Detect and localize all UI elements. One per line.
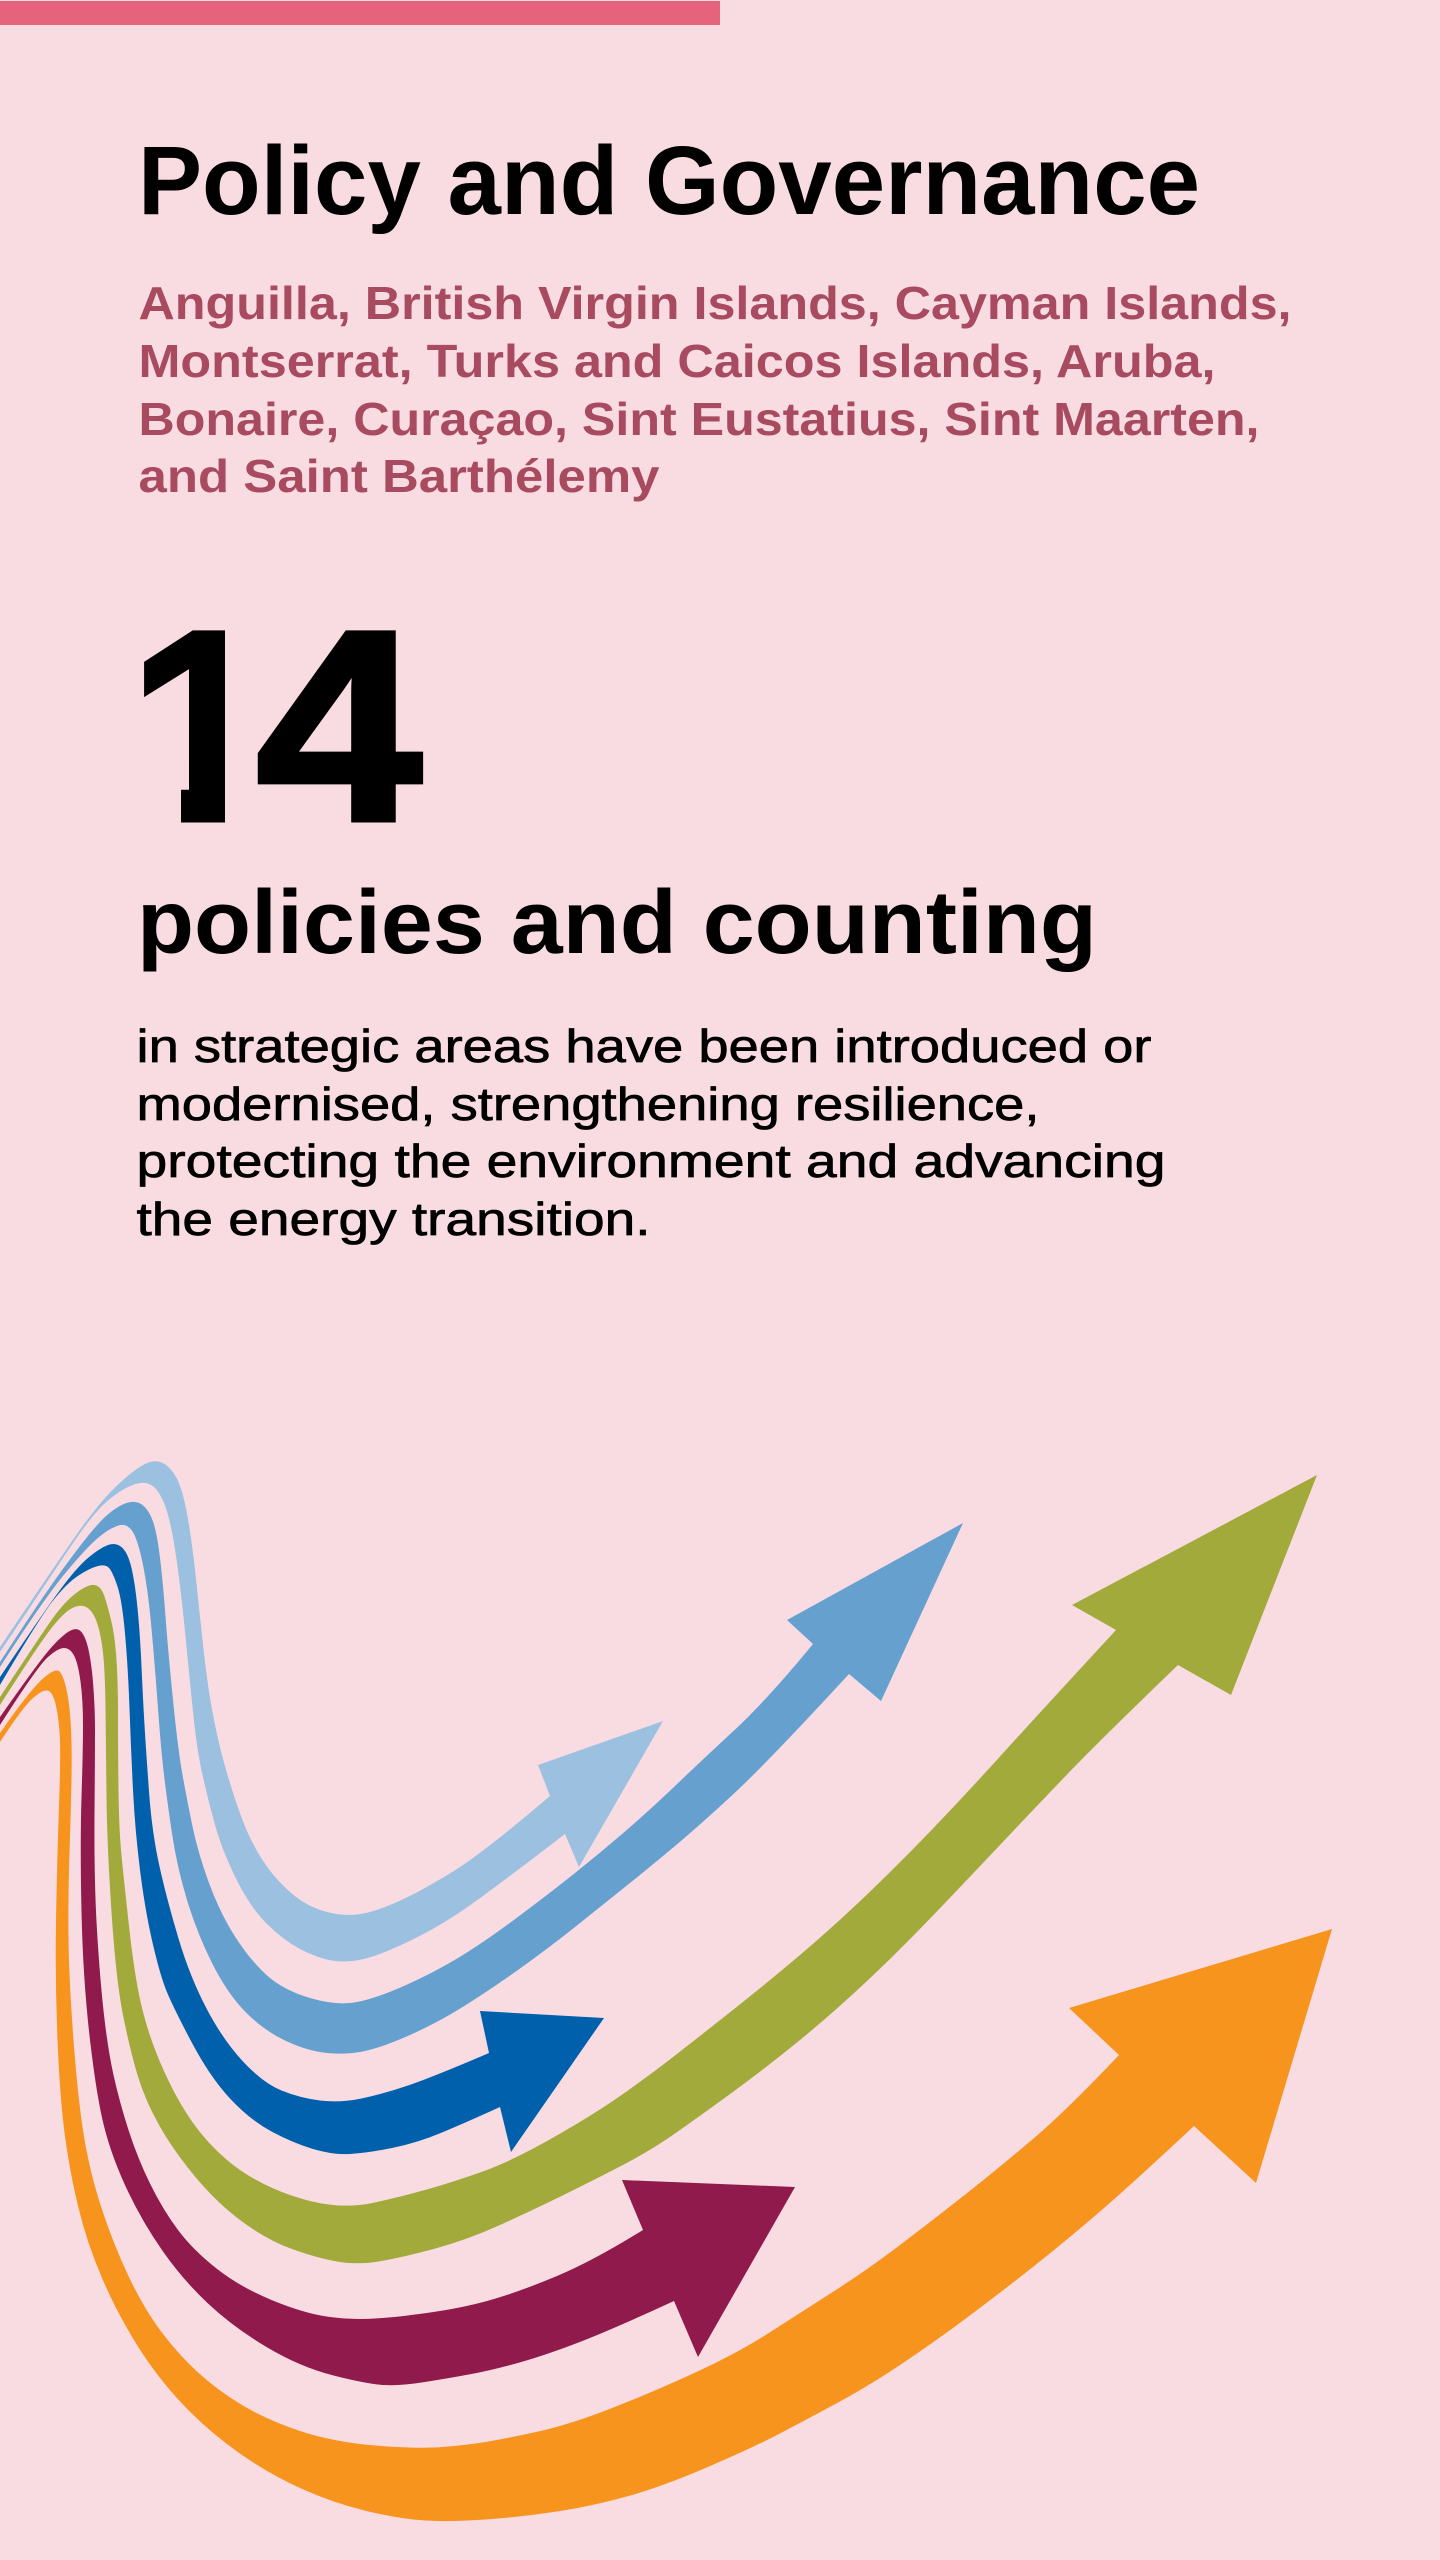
subheading: policies and counting: policies and counting <box>137 873 1097 973</box>
title: Policy and Governance <box>138 126 1200 235</box>
big number 14 <box>144 630 424 822</box>
body text <box>136 1020 1166 1245</box>
arrow: light blue <box>0 1461 663 1961</box>
body text: modernised, strengthening resilience, <box>136 1078 1040 1130</box>
arrow: maroon <box>0 1629 795 2385</box>
big number 14: 4 <box>256 574 424 878</box>
arrow: medium blue <box>0 1502 963 2054</box>
territories list: Bonaire, Curaçao, Sint Eustatius, Sint Maarten, <box>138 393 1260 445</box>
arrow: dark blue <box>0 1544 604 2154</box>
territories list: Montserrat, Turks and Caicos Islands, Aruba, <box>138 335 1216 387</box>
territories list: and Saint Barthélemy <box>138 450 660 502</box>
body text: in strategic areas have been introduced or <box>136 1020 1152 1072</box>
arrow: orange <box>0 1670 1332 2521</box>
territories list <box>138 277 1292 502</box>
territories list: Anguilla, British Virgin Islands, Cayman Islands, <box>138 277 1292 329</box>
body text: the energy transition. <box>136 1193 650 1245</box>
body text: protecting the environment and advancing <box>136 1135 1166 1187</box>
arrow: green <box>0 1475 1317 2263</box>
big number 14: 1 <box>128 574 279 878</box>
arrows illustration <box>0 1461 1332 2521</box>
top accent bar <box>0 1 720 25</box>
